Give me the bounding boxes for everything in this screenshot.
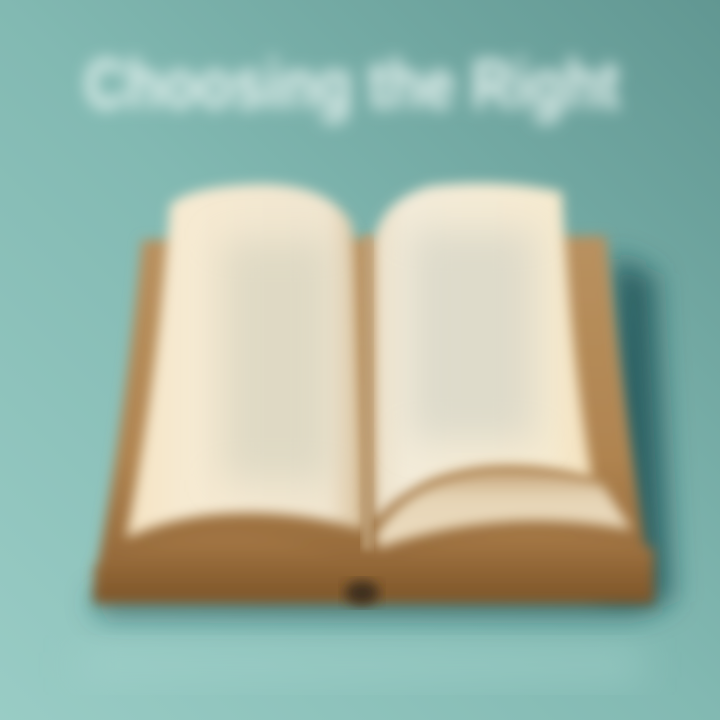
right page stack: [376, 472, 632, 548]
left page text block: [222, 240, 332, 480]
left page: [126, 184, 364, 538]
book cover: [93, 236, 654, 604]
right page: [374, 183, 592, 522]
center gutter: [362, 235, 372, 550]
book shadow: [92, 255, 672, 614]
right page text block: [410, 230, 535, 440]
spine shadow: [345, 581, 379, 605]
open book: [93, 183, 654, 605]
title: Choosing the Right: [84, 45, 620, 123]
bottom caption: [80, 650, 640, 680]
